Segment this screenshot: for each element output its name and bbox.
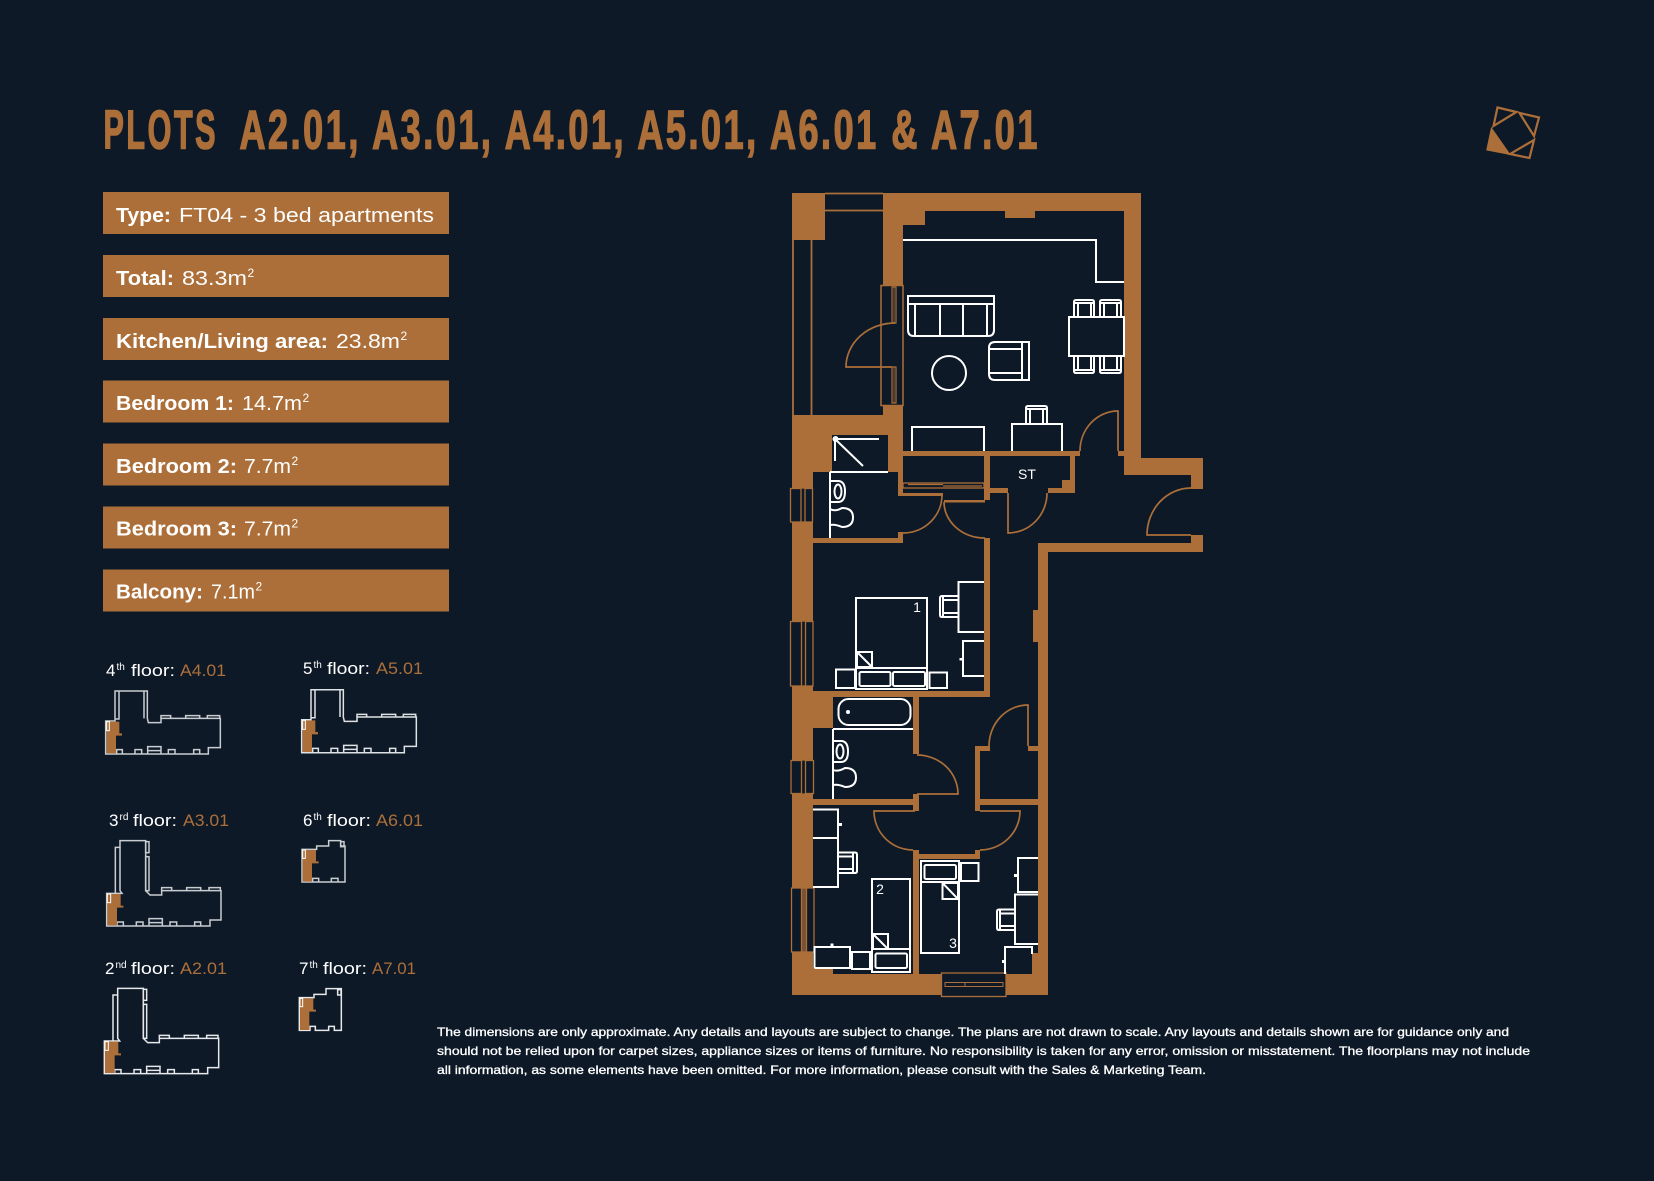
icon: logo bbox=[1488, 108, 1539, 158]
panel: 3rd floor key plan: floor: bbox=[133, 811, 177, 830]
bed number 1: 1 bbox=[913, 599, 921, 615]
bedroom 3 furniture bbox=[997, 858, 1038, 974]
desk and chair bbox=[1012, 406, 1062, 451]
panel: 2nd floor key plan: floor: bbox=[131, 959, 175, 978]
ensuite wc bbox=[830, 472, 888, 538]
bar: bedroom 3 bbox=[103, 506, 449, 548]
panel: area schedule bbox=[103, 192, 449, 612]
panel: 6th floor key plan bbox=[302, 811, 423, 882]
bedroom 1 bed bbox=[856, 598, 927, 689]
bar: balcony bbox=[103, 570, 449, 612]
walls bbox=[792, 193, 1203, 995]
bar: total: Total: bbox=[116, 267, 174, 290]
panel: 7th floor key plan: A7.01 bbox=[372, 959, 416, 978]
bar: total: 83.3m bbox=[182, 267, 247, 290]
bar: type bbox=[103, 192, 449, 234]
balcony outline bbox=[793, 194, 883, 415]
bar: total bbox=[103, 255, 449, 297]
bedroom 3 nightstand bbox=[961, 863, 978, 881]
disclaimer: The dimensions are only approximate. Any details and layouts are subject to change. The plans are not drawn to scale. Any layouts and details shown are for guidance only and bbox=[437, 1026, 1509, 1039]
panel: 2nd floor key plan: 2 bbox=[105, 959, 114, 978]
tv unit bbox=[912, 427, 984, 451]
panel: 6th floor key plan: A6.01 bbox=[376, 811, 423, 830]
panel: 7th floor key plan: th bbox=[310, 960, 318, 971]
panel: 3rd floor key plan: 3 bbox=[109, 811, 118, 830]
bed number 3: 3 bbox=[949, 935, 957, 951]
bar: bedroom 2 bbox=[103, 444, 449, 486]
panel: 3rd floor key plan: A3.01 bbox=[183, 811, 229, 830]
bedroom 1 dresser bbox=[960, 641, 984, 676]
bar: balcony: 2 bbox=[256, 580, 262, 594]
bar: bedroom 1 bbox=[103, 380, 449, 422]
bedroom 2 storage bbox=[814, 944, 870, 969]
disclaimer bbox=[437, 1026, 1530, 1077]
panel: 2nd floor key plan: nd bbox=[116, 960, 127, 971]
bar: kitchen living area bbox=[103, 318, 449, 360]
panel: 3rd floor key plan: rd bbox=[120, 812, 128, 823]
bar: bedroom 1: 2 bbox=[302, 391, 310, 405]
bar: kitchen living area: Kitchen/Living area: bbox=[116, 330, 328, 353]
bar: balcony: Balcony: bbox=[116, 580, 203, 604]
bar: bedroom 3: 2 bbox=[292, 516, 298, 530]
bar: type: FT04 - 3 bed apartments bbox=[179, 204, 434, 227]
panel: 7th floor key plan bbox=[299, 959, 416, 1030]
bar: balcony: 7.1m bbox=[211, 580, 255, 604]
door swings bbox=[874, 411, 1191, 850]
panel: 5th floor key plan: th bbox=[314, 660, 322, 671]
armchair bbox=[989, 342, 1029, 380]
bedroom 3 bed bbox=[921, 861, 959, 953]
disclaimer: should not be relied upon for carpet sizes, appliance sizes or items of furniture. No responsibility is taken for any error, omission or misstatement. The floorplans may not include bbox=[437, 1045, 1530, 1058]
bar: bedroom 3: Bedroom 3: bbox=[116, 518, 237, 540]
bar: bedroom 2: 7.7m bbox=[244, 455, 291, 478]
panel: 2nd floor key plan bbox=[104, 959, 227, 1074]
bar: kitchen living area: 2 bbox=[400, 329, 408, 343]
coffee table bbox=[932, 356, 966, 390]
panel: 4th floor key plan: floor: bbox=[131, 661, 175, 680]
panel: 5th floor key plan bbox=[302, 659, 423, 753]
panel: 6th floor key plan: th bbox=[314, 812, 322, 823]
title: A2.01, A3.01, A4.01, A5.01, A6.01 & A7.01 bbox=[240, 99, 1040, 160]
bath bbox=[833, 699, 913, 799]
bedroom 2 bed bbox=[872, 879, 910, 972]
bar: bedroom 3: 7.7m bbox=[244, 518, 291, 540]
panel: 7th floor key plan: floor: bbox=[323, 959, 367, 978]
panel: 5th floor key plan: floor: bbox=[327, 659, 370, 678]
windows on left wall bbox=[790, 488, 814, 952]
panel: 2nd floor key plan: A2.01 bbox=[180, 959, 227, 978]
shower bbox=[834, 437, 879, 466]
bar: bedroom 2: Bedroom 2: bbox=[116, 455, 237, 478]
disclaimer: all information, as some elements have been omitted. For more information, please consult with the Sales & Marketing Team. bbox=[437, 1064, 1206, 1077]
bed number 2: 2 bbox=[876, 881, 884, 897]
title: PLOTS bbox=[104, 100, 218, 161]
panel: 6th floor key plan: floor: bbox=[327, 811, 371, 830]
balcony sliding door bbox=[846, 286, 903, 406]
cupboard sliding doors bbox=[903, 483, 984, 488]
sofa bbox=[908, 296, 994, 336]
bar: kitchen living area: 23.8m bbox=[336, 330, 400, 353]
kitchen counter bbox=[903, 240, 1124, 282]
panel: 5th floor key plan: A5.01 bbox=[376, 659, 423, 678]
panel: 6th floor key plan: 6 bbox=[303, 811, 312, 830]
bar: type: Type: bbox=[116, 204, 171, 227]
floor plan bbox=[790, 193, 1203, 996]
panel: 4th floor key plan: 4 bbox=[106, 661, 115, 680]
dining table and chairs bbox=[1069, 300, 1124, 373]
bar: total: 2 bbox=[248, 266, 254, 280]
panel: 7th floor key plan: 7 bbox=[299, 959, 308, 978]
bedroom 1 nightstands bbox=[836, 670, 947, 688]
panel: 4th floor key plan: th bbox=[116, 662, 125, 673]
window on bottom wall bbox=[942, 973, 1006, 996]
bedroom 2 desk and chair bbox=[813, 810, 857, 887]
bathroom wc bbox=[833, 741, 856, 787]
panel: 3rd floor key plan bbox=[107, 811, 229, 926]
bar: bedroom 1: 14.7m bbox=[242, 392, 302, 415]
bar: bedroom 1: Bedroom 1: bbox=[116, 392, 234, 415]
panel: 5th floor key plan: 5 bbox=[303, 659, 312, 678]
panel: 4th floor key plan: A4.01 bbox=[180, 661, 226, 680]
bedroom 1 desk and chair bbox=[940, 582, 984, 632]
storage label: ST bbox=[1018, 466, 1036, 482]
panel: 4th floor key plan bbox=[106, 661, 226, 754]
bar: bedroom 2: 2 bbox=[292, 454, 298, 468]
